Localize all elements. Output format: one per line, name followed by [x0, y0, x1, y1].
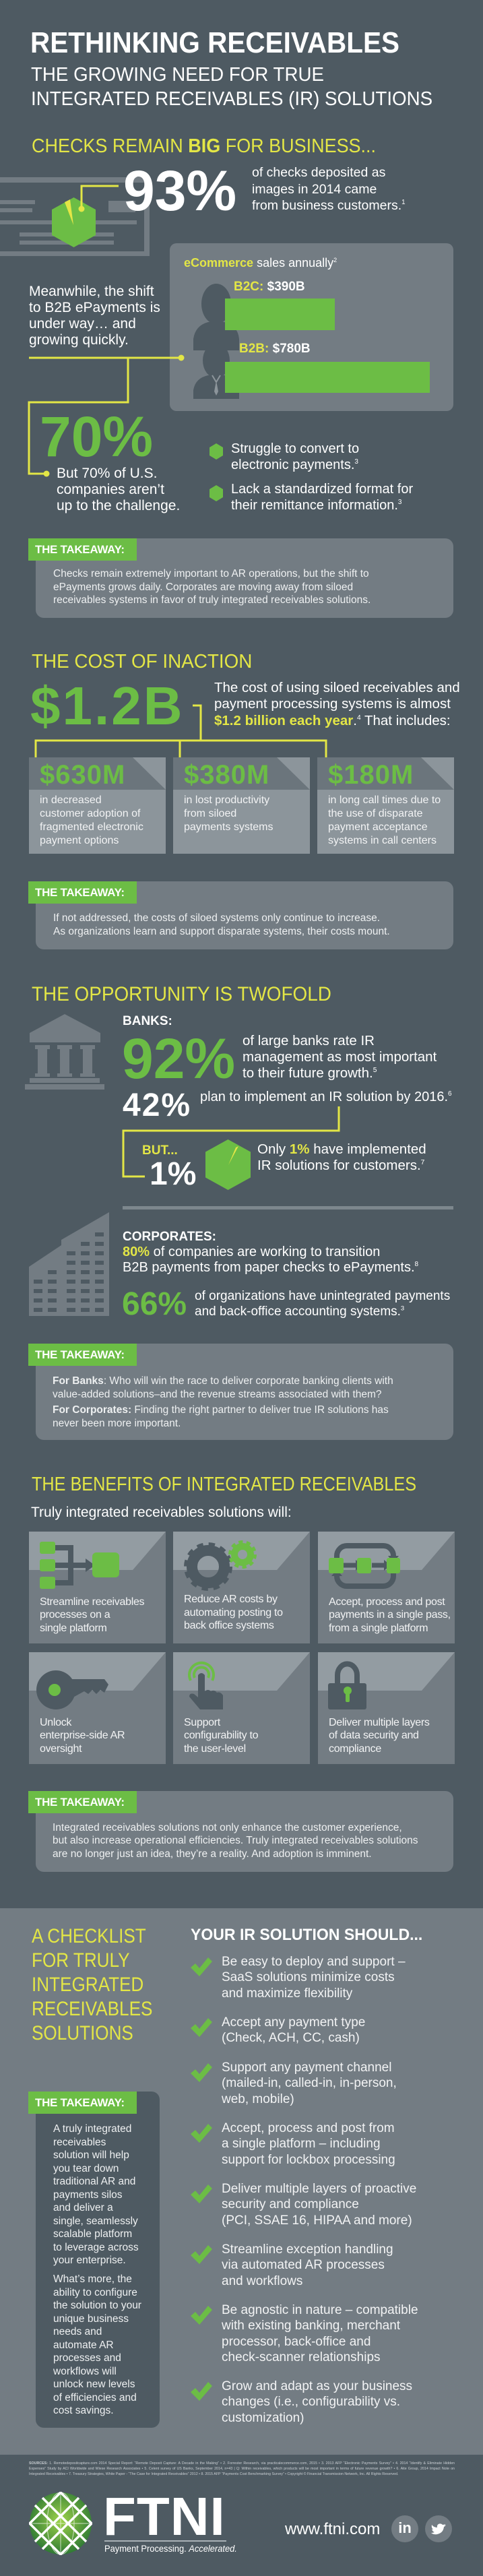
stat: 66%: 66% [122, 1286, 187, 1322]
text: large banks: management as most important [243, 1049, 437, 1065]
item 1: SaaS solutions minimize costs [222, 1970, 395, 1984]
box: $630M: payment options [40, 834, 119, 846]
tile: security: compliance [329, 1742, 381, 1755]
takeaway 5: A truly integrated [53, 2123, 131, 2135]
stat: 1%: 1% [150, 1156, 196, 1192]
bar: B2B [225, 362, 430, 393]
heading: opportunity twofold: THE OPPORTUNITY IS TWOFOLD [32, 983, 331, 1005]
box: $380M: $380M [184, 760, 269, 790]
stat: 70%: 70% [40, 405, 153, 468]
text: unintegrated: of organizations have unintegrated payments [195, 1289, 450, 1303]
bar: B2C [225, 299, 335, 330]
takeaway 5: the solution to your [53, 2300, 141, 2311]
tile: support configurability: the user-level [184, 1742, 246, 1755]
text: only 1%: Only 1% have implemented [257, 1141, 426, 1157]
box: $180M: systems in call centers [328, 834, 437, 846]
stat: 42%: 42% [123, 1088, 191, 1123]
item 2: (Check, ACH, CC, cash) [222, 2031, 360, 2045]
item 1: and maximize flexibility [222, 1986, 352, 2000]
icon: touch [189, 1663, 223, 1709]
takeaway 5: solution will help [53, 2149, 129, 2161]
takeaway 5: single, seamlessly [53, 2216, 138, 2226]
item 7: with existing banking, merchant [222, 2319, 400, 2333]
heading: benefits: THE BENEFITS OF INTEGRATED RECEIVABLES [32, 1474, 416, 1495]
item 5 [191, 2182, 416, 2228]
text: checks deposited: images in 2014 came [252, 182, 377, 197]
heading: your IR solution should: YOUR IR SOLUTION SHOULD... [191, 1926, 422, 1944]
heading: banks: BANKS: [123, 1014, 172, 1028]
item 3: web, mobile) [222, 2092, 294, 2106]
panel: checklist [0, 1908, 483, 2455]
item 8: changes (i.e., configurability vs. [222, 2395, 400, 2409]
item 4: Accept, process and post from [222, 2121, 395, 2135]
text: unintegrated: and back-office accounting systems.3 [195, 1305, 404, 1319]
icon: check graphic [0, 177, 150, 256]
takeaway 5: payments silos [53, 2189, 123, 2201]
takeaway 5: scalable platform [53, 2228, 132, 2240]
text: large banks: to their future growth.5 [243, 1065, 377, 1081]
box: $180M [317, 757, 454, 854]
tile: unlock: oversight [40, 1742, 82, 1755]
box: $180M: $180M [328, 760, 414, 790]
title: RETHINKING RECEIVABLES [30, 26, 399, 59]
text: plan to implement: plan to implement an IR solution by 2016.6 [200, 1090, 452, 1104]
takeaway 5: THE TAKEAWAY: [35, 2096, 125, 2109]
item 8: Grow and adapt as your business [222, 2379, 412, 2393]
box: $380M: payments systems [184, 821, 273, 833]
text: unintegrated [195, 1289, 450, 1319]
tile: security: of data security and [329, 1730, 419, 1741]
text: but 70%: up to the challenge. [57, 498, 180, 513]
connector: meanwhile to 70% [28, 354, 185, 477]
item 5: (PCI, SSAE 16, HIPAA and more) [222, 2213, 412, 2228]
label: B2B: B2B: $780B [239, 342, 311, 356]
takeaway 5 [28, 2092, 160, 2428]
takeaway 5: receivables [53, 2136, 106, 2148]
tile: support configurability: Support [184, 1717, 220, 1728]
takeaway 5: to leverage across [53, 2241, 139, 2253]
box: $630M: in decreased [40, 794, 102, 806]
text: meanwhile: to B2B ePayments is [29, 300, 160, 315]
takeaway 4: are no longer just an idea, they’re a reality. And adoption is imminent. [53, 1848, 372, 1860]
tile: security: Deliver multiple layers [329, 1717, 430, 1728]
icon: person B2B [193, 350, 239, 399]
stat: $1.2B: $1.2B [30, 676, 184, 736]
item 2: Accept any payment type [222, 2015, 365, 2030]
logo: globe [29, 2492, 92, 2555]
text: cost of siloed [214, 679, 460, 728]
tile: streamline [29, 1532, 166, 1643]
takeaway 3 [28, 1344, 453, 1440]
text: meanwhile: Meanwhile, the shift [29, 284, 154, 299]
icon: bank [25, 1014, 104, 1090]
stat: 93%: 93% [123, 159, 236, 222]
tile: streamline: Streamline receivables [40, 1596, 144, 1608]
takeaway 1: receivables systems in favor of truly integrated receivables solutions. [53, 594, 371, 606]
icon: flow [40, 1542, 119, 1589]
panel: eCommerce [170, 243, 453, 411]
item 2 [191, 2015, 365, 2045]
heading: checklist: RECEIVABLES [32, 1998, 152, 2020]
takeaway 1: Checks remain extremely important to AR operations, but the shift to [53, 568, 369, 579]
takeaway 4: but also increase operational efficiencies. Truly integrated receivables solutions [53, 1835, 418, 1846]
text: meanwhile: growing quickly. [29, 332, 129, 348]
heading: checklist: A CHECKLIST [32, 1925, 146, 1947]
text: meanwhile [29, 284, 160, 348]
stat: 92%: 92% [122, 1027, 235, 1090]
item 3: Support any payment channel [222, 2061, 391, 2074]
item 7: processor, back-office and [222, 2334, 371, 2349]
tile: accept process post: Accept, process and post [329, 1596, 445, 1608]
box: $630M [29, 757, 166, 854]
box: $380M [173, 757, 310, 854]
tile: unlock: enterprise-side AR [40, 1730, 125, 1741]
icon: linkedin: in [398, 2519, 412, 2536]
takeaway 2: As organizations learn and support disparate systems, their costs mount. [53, 926, 390, 937]
box: $180M: in long call times due to [328, 794, 441, 806]
bullet: struggle to convert [210, 441, 359, 472]
icon: gears [187, 1542, 255, 1588]
connector: 42% to 1% [123, 1106, 340, 1178]
tile: reduce AR costs [173, 1532, 310, 1643]
takeaway 5: What’s more, the [53, 2273, 132, 2285]
heading: checks remain big: CHECKS REMAIN BIG FOR BUSINESS... [32, 135, 376, 157]
text: 80% of companies [123, 1244, 418, 1275]
heading: corporates: CORPORATES: [123, 1230, 216, 1244]
takeaway 2 [28, 881, 453, 949]
bullet: struggle to convert: electronic payments.3 [231, 458, 358, 472]
label: B2C: B2C: $390B [234, 280, 305, 294]
icon: lock [328, 1664, 366, 1709]
item 1 [191, 1954, 406, 2000]
footer: website: www.ftni.com [285, 2520, 380, 2538]
takeaway 5: unique business [53, 2313, 129, 2325]
takeaway 3: never been more important. [53, 1418, 181, 1428]
tile: support configurability [173, 1652, 310, 1764]
text: 80% of companies: B2B payments from paper checks to ePayments.8 [123, 1260, 418, 1275]
bullet: lack standardized format: their remittance information.3 [231, 498, 401, 513]
tile: streamline: single platform [40, 1623, 107, 1633]
box: $180M: the use of disparate [328, 807, 423, 819]
takeaway 5: and deliver a [53, 2202, 113, 2213]
text: cost of siloed: $1.2 billion each year.4 That includes: [214, 713, 451, 728]
takeaway 5: ability to configure [53, 2287, 137, 2298]
tile: unlock: Unlock [40, 1717, 71, 1728]
takeaway 5: needs and [53, 2326, 102, 2337]
takeaway 2: If not addressed, the costs of siloed systems only continue to increase. [53, 912, 380, 924]
bullet: lack standardized format [210, 482, 413, 513]
tile: accept process post: payments in a single pass, [329, 1609, 451, 1621]
subtitle: INTEGRATED RECEIVABLES (IR) SOLUTIONS [31, 88, 432, 110]
icon: cycle [329, 1546, 400, 1586]
takeaway 5: automate AR [53, 2339, 114, 2350]
takeaway 3: THE TAKEAWAY: [35, 1348, 125, 1361]
item 7 [191, 2303, 418, 2364]
takeaway 1 [28, 538, 453, 618]
text: but 70%: companies aren’t [57, 482, 164, 497]
tile: unlock [29, 1652, 166, 1764]
heading: checklist: FOR TRULY [32, 1949, 130, 1972]
icon: twitter [425, 2515, 452, 2542]
takeaway 3: value-added solutions–and the revenue streams associated with them? [53, 1388, 382, 1400]
logo: FTNI: FTNI [103, 2486, 226, 2546]
takeaway 2: THE TAKEAWAY: [35, 886, 125, 899]
tile: accept process post [318, 1532, 455, 1643]
takeaway 5: cost savings. [53, 2405, 114, 2416]
text: only 1%: IR solutions for customers.7 [257, 1158, 424, 1173]
takeaway 5: unlock new levels [53, 2379, 135, 2390]
item 3 [191, 2061, 397, 2106]
takeaway 5: of efficiencies and [53, 2392, 137, 2403]
heading: cost of inaction: THE COST OF INACTION [32, 651, 252, 672]
icon: linkedin [391, 2515, 418, 2542]
bullet: struggle to convert: Struggle to convert to [231, 441, 359, 456]
tile: streamline: processes on a [40, 1609, 110, 1621]
item 3: (mailed-in, called-in, in-person, [222, 2076, 397, 2090]
text: checks deposited: of checks deposited as [252, 165, 385, 180]
box: $630M: fragmented electronic [40, 821, 143, 833]
item 6 [191, 2242, 393, 2288]
text: meanwhile: under way… and [29, 316, 136, 332]
text: cost of siloed: payment processing systems is almost [214, 696, 451, 712]
text: truly integrated: Truly integrated receivables solutions will: [31, 1505, 292, 1520]
takeaway 4: THE TAKEAWAY: [35, 1796, 125, 1809]
text: large banks: of large banks rate IR [243, 1033, 375, 1048]
takeaway 1: ePayments grows daily. Corporates are moving away from siloed [53, 581, 353, 593]
takeaway 3: For Banks: Who will win the race to deliver corporate banking clients with [53, 1375, 393, 1387]
text: only 1% [257, 1141, 426, 1173]
takeaway 4: Integrated receivables solutions not only enhance the customer experience, [53, 1822, 402, 1833]
tile: reduce AR costs: back office systems [184, 1620, 274, 1631]
heading: checklist: SOLUTIONS [32, 2022, 133, 2044]
connector: cost breakdown [35, 705, 327, 757]
text: large banks [243, 1033, 437, 1081]
icon: person B2C [193, 284, 239, 350]
item 8: customization) [222, 2411, 304, 2424]
takeaway 5: workflows will [53, 2365, 117, 2377]
item 6: via automated AR processes [222, 2258, 385, 2272]
item 4 [191, 2121, 395, 2167]
icon: hexagon 1% [205, 1139, 251, 1190]
takeaway 4 [28, 1791, 453, 1872]
subtitle: THE GROWING NEED FOR TRUE [31, 64, 324, 86]
heading: checklist: INTEGRATED [32, 1974, 143, 1996]
subtitle [31, 64, 432, 110]
box: $630M: $630M [40, 760, 125, 790]
item 4: support for lockbox processing [222, 2152, 395, 2167]
icon: key [36, 1670, 108, 1709]
tile: security [318, 1652, 455, 1764]
heading: checklist [32, 1925, 152, 2044]
checklist items [191, 1954, 418, 2424]
item 7: Be agnostic in nature – compatible [222, 2303, 418, 2317]
text: cost of siloed: The cost of using siloed receivables and [214, 679, 460, 695]
item 6: and workflows [222, 2273, 302, 2288]
box: $180M: payment acceptance [328, 821, 428, 833]
takeaway 5: your enterprise. [53, 2255, 126, 2266]
item 4: a single platform – including [222, 2137, 381, 2151]
box: $380M: in lost productivity [184, 794, 269, 806]
takeaway 1: THE TAKEAWAY: [35, 543, 125, 556]
item 8 [191, 2379, 412, 2424]
box: $380M: from siloed [184, 807, 236, 819]
tile: support configurability: configurability to [184, 1730, 258, 1741]
text: but 70%: But 70% of U.S. [57, 466, 157, 481]
takeaway 5: you tear down [53, 2163, 119, 2174]
text: 80% of companies: 80% of companies are working to transition [123, 1244, 380, 1259]
box: $630M: customer adoption of [40, 807, 140, 819]
takeaway 5: traditional AR and [53, 2176, 135, 2187]
item 1: Be easy to deploy and support – [222, 1954, 406, 1969]
item 6: Streamline exception handling [222, 2242, 393, 2256]
icon: corporate building [29, 1212, 109, 1316]
takeaway 3: For Corporates: Finding the right partner to deliver true IR solutions has [53, 1404, 389, 1415]
text: but 70% [57, 466, 180, 513]
tile: reduce AR costs: automating posting to [184, 1606, 283, 1619]
logo: tagline: Payment Processing. Accelerated. [104, 2543, 237, 2554]
heading: eCommerce sales: eCommerce sales annually2 [184, 256, 337, 270]
text: checks deposited: from business customers.1 [252, 198, 406, 213]
text: checks deposited [252, 165, 406, 213]
text: but...: BUT... [142, 1143, 178, 1158]
item 5: Deliver multiple layers of proactive [222, 2182, 416, 2195]
tile: accept process post: from a single platform [329, 1623, 428, 1633]
tile: reduce AR costs: Reduce AR costs by [184, 1594, 278, 1605]
bullet: lack standardized format: Lack a standardized format for [231, 482, 413, 497]
footer sources: SOURCES: 1. Remotedepositcapture.com 2014 Special Report: “Remote Deposit Capture: A Decade in the Making” • 2. Forrester Research, via practicalecommerce.com, 2015 • 3. 2013 AFP “Electronic Payments Survey” • 4. 2014 “Identify & Eliminate Hidden Expenses” Study by ACI Worldwide and Wiese Research Associates • 5. Celent survey of US Banks, September 2014, n=43 | Q: Within receivables, which products will be most important in terms of future revenue growth? • 6. Aite Group, 2014 Impact Note on Integrated Receivables • 7. Treasury Strategies, White Paper - “The Case for Integrated Receivables” 2012 • 8. 2015 AFP “Payments Cost Benchmarking Survey” • Copyright © Financial Transmission Network, Inc. All Rights Reserved. [29, 2461, 455, 2476]
item 7: check-scanner relationships [222, 2350, 381, 2364]
takeaway 5: processes and [53, 2352, 121, 2364]
item 5: security and compliance [222, 2197, 359, 2211]
